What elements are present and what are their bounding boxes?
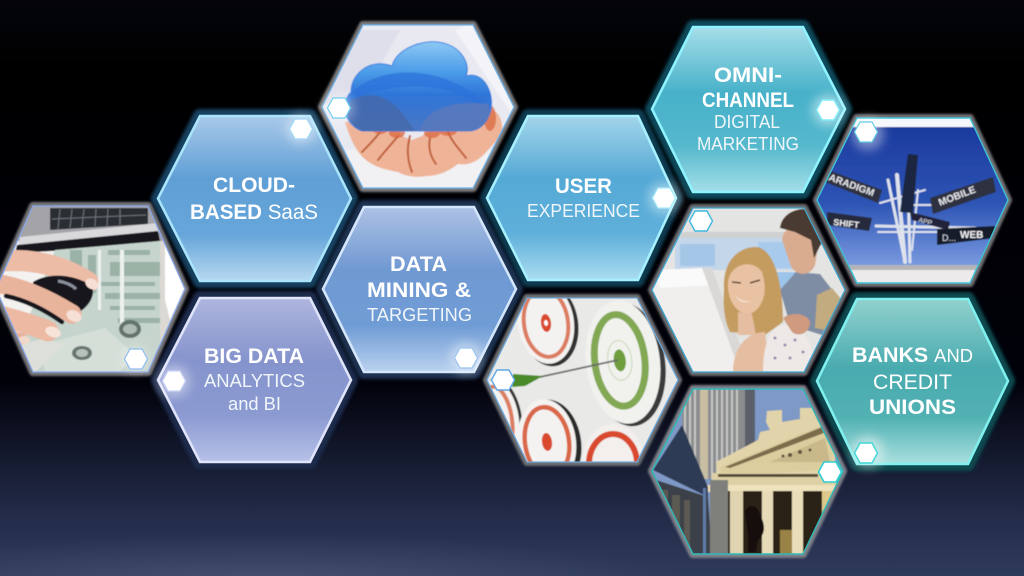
badge: couple photo [690, 211, 712, 231]
badge: banks [852, 436, 884, 468]
panel: cloud-based SaaS [158, 116, 351, 281]
panel: user experience [487, 116, 676, 280]
panel: photo of signpost: MOBILE [937, 184, 978, 209]
panel: photo of signpost: D... [942, 233, 956, 243]
label: big data analytics and BI: BIG DATA [204, 345, 304, 368]
label: omni-channel digital marketing: CHANNEL [702, 89, 794, 112]
panel: photo of cloud in cupped hands [320, 23, 516, 190]
label: banks and credit unions: BANKS AND [852, 344, 973, 367]
label: big data analytics and BI: and BI [228, 394, 281, 414]
label: banks and credit unions: CREDIT [873, 371, 952, 394]
panel: data mining and targeting [323, 207, 516, 372]
panel: photo of signpost: WEB [960, 230, 983, 241]
badge: data mining [450, 342, 482, 374]
badge: cloud-based SaaS [286, 114, 316, 144]
panel: photo of signpost: ARADIGM [827, 172, 876, 199]
panel: photo of archery targets [482, 292, 684, 468]
label: data mining and targeting: TARGETING [367, 305, 472, 325]
label: user experience: EXPERIENCE [527, 201, 640, 221]
label: banks and credit unions [852, 344, 973, 419]
badge: big data [158, 365, 190, 397]
badge: signpost photo [852, 118, 884, 150]
panel: banks and credit unions [817, 299, 1008, 464]
panel: omni-channel digital marketing [652, 27, 845, 192]
badge: money photo [122, 345, 150, 373]
panel: photo of bank building [650, 387, 846, 556]
label: user experience: USER [555, 175, 612, 198]
panel: photo of signpost: SHIFT [833, 217, 860, 230]
panel: big data analytics and BI [158, 298, 351, 462]
badges: small white hexagon markers [122, 93, 884, 482]
label: big data analytics and BI [204, 345, 305, 414]
label: cloud-based SaaS: CLOUD- [213, 174, 295, 197]
label: data mining and targeting: DATA [390, 253, 447, 276]
label: cloud-based SaaS: BASED SaaS [190, 201, 318, 224]
badge: user experience [648, 182, 680, 214]
label: big data analytics and BI: ANALYTICS [204, 371, 305, 391]
badge: bank photo [818, 462, 842, 482]
panel: photo of signpost [815, 116, 1010, 285]
badge: omni-channel [812, 94, 844, 126]
badge: target photo [492, 370, 514, 390]
label: data mining and targeting [367, 253, 472, 325]
panel: photo of hand on mouse over money [0, 205, 190, 375]
panel: photo of couple at a computer [650, 206, 847, 374]
label: banks and credit unions: UNIONS [869, 396, 956, 419]
label: omni-channel digital marketing [697, 64, 799, 154]
label: user experience [527, 175, 640, 221]
badge: cloud photo [324, 93, 354, 123]
label: omni-channel digital marketing: MARKETING [697, 134, 799, 154]
label: omni-channel digital marketing: OMNI- [714, 64, 782, 87]
label: data mining and targeting: MINING & [367, 279, 471, 302]
label: omni-channel digital marketing: DIGITAL [714, 112, 780, 132]
panel: photo of signpost: APP [918, 217, 933, 227]
label: cloud-based SaaS [190, 174, 318, 224]
